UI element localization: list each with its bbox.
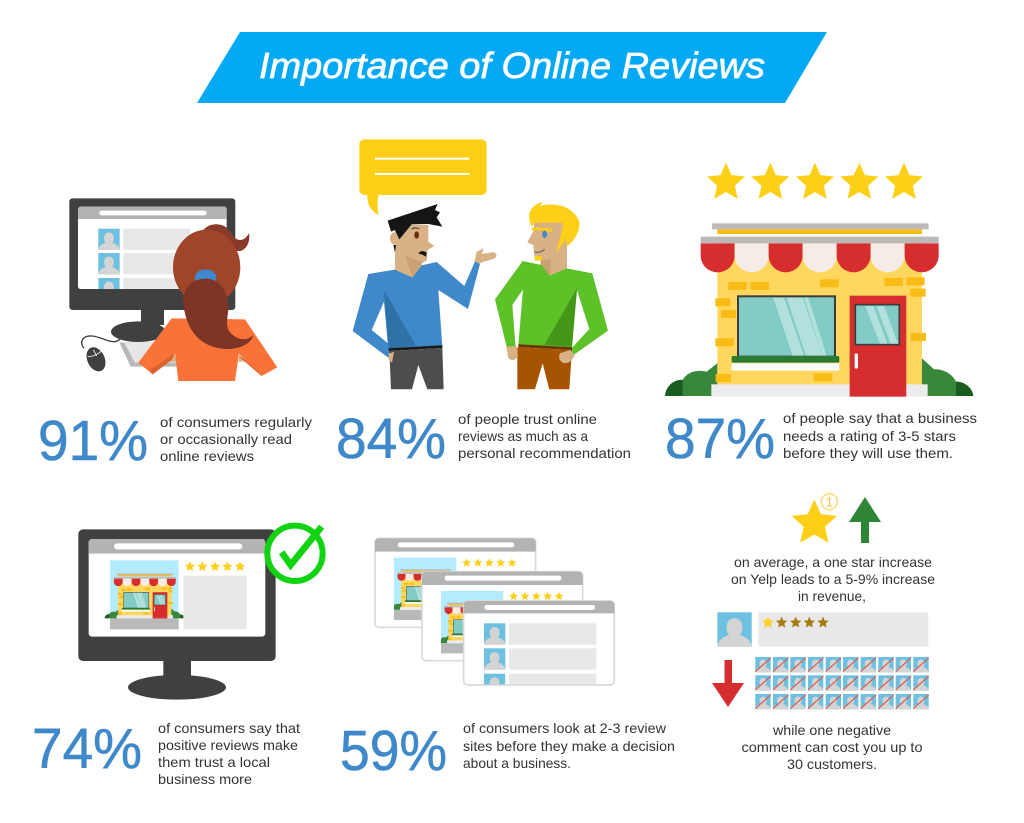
text: 74% description: of consumers say that — [158, 720, 300, 736]
stat: 87%: 87% — [665, 407, 775, 471]
title banner — [197, 32, 827, 103]
icon: green check mark — [267, 526, 323, 581]
icon: stacked browser windows — [375, 538, 614, 695]
panel: 59% multiple sites — [340, 538, 675, 783]
panel: 91% read reviews — [38, 198, 312, 473]
icon: grid of lost customers — [755, 657, 929, 709]
text: 87% description — [783, 410, 977, 461]
text: negative comment cost: comment can cost you up to — [742, 739, 923, 755]
text: 74% description: them trust a local — [158, 754, 270, 770]
panel: 84% trust reviews — [336, 139, 631, 471]
stat: 59%: 59% — [340, 719, 447, 783]
text: 84% description: personal recommendation — [458, 445, 631, 461]
icon: five stars — [707, 163, 923, 199]
text: 87% description: of people say that a business — [783, 410, 977, 426]
title banner: Importance of Online Reviews — [259, 45, 765, 86]
icon: monitor with store page — [78, 529, 276, 700]
text: 84% description: of people trust online — [458, 411, 597, 427]
text: one star increase: on average, a one star increase — [734, 554, 932, 570]
text: one star increase — [731, 554, 935, 604]
icon: green up arrow — [849, 497, 881, 543]
stat: 84%: 84% — [336, 407, 446, 471]
text: 91% description: of consumers regularly — [160, 414, 312, 430]
icon: two men talking — [353, 139, 608, 389]
text: 74% description: positive reviews make — [158, 737, 298, 753]
text: 59% description: about a business. — [463, 755, 571, 771]
text: 91% description — [160, 414, 312, 464]
panel: 87% rating — [665, 163, 977, 471]
icon: one star review — [717, 612, 928, 647]
text: 87% description: before they will use them. — [783, 445, 953, 461]
text: 84% description — [458, 411, 631, 461]
icon: star with number one: 1 — [826, 495, 833, 510]
text: 59% description — [463, 720, 675, 771]
panel: 74% trust local business — [32, 526, 323, 787]
stat: 74%: 74% — [32, 717, 142, 781]
text: 91% description: or occasionally read — [160, 431, 292, 447]
text: 91% description: online reviews — [160, 448, 254, 464]
text: negative comment cost — [742, 722, 923, 772]
text: negative comment cost: 30 customers. — [787, 756, 877, 772]
text: negative comment cost: while one negative — [772, 722, 891, 738]
text: 59% description: of consumers look at 2-3 review — [463, 720, 667, 736]
text: 74% description: business more — [158, 771, 252, 787]
text: one star increase: on Yelp leads to a 5-9% increase — [731, 571, 935, 587]
text: one star increase: in revenue, — [798, 588, 866, 604]
stat: 91%: 91% — [38, 409, 148, 473]
text: 59% description: sites before they make a decision — [463, 738, 675, 754]
panel: Yelp stars and negative comments — [712, 494, 935, 772]
icon: woman at computer — [69, 198, 277, 381]
text: 84% description: reviews as much as a — [458, 428, 588, 444]
text: 74% description — [158, 720, 300, 787]
icon: red down arrow — [712, 660, 744, 707]
text: 87% description: needs a rating of 3-5 stars — [783, 428, 956, 444]
icon: storefront — [665, 223, 973, 397]
icon: star with number one — [792, 494, 837, 543]
